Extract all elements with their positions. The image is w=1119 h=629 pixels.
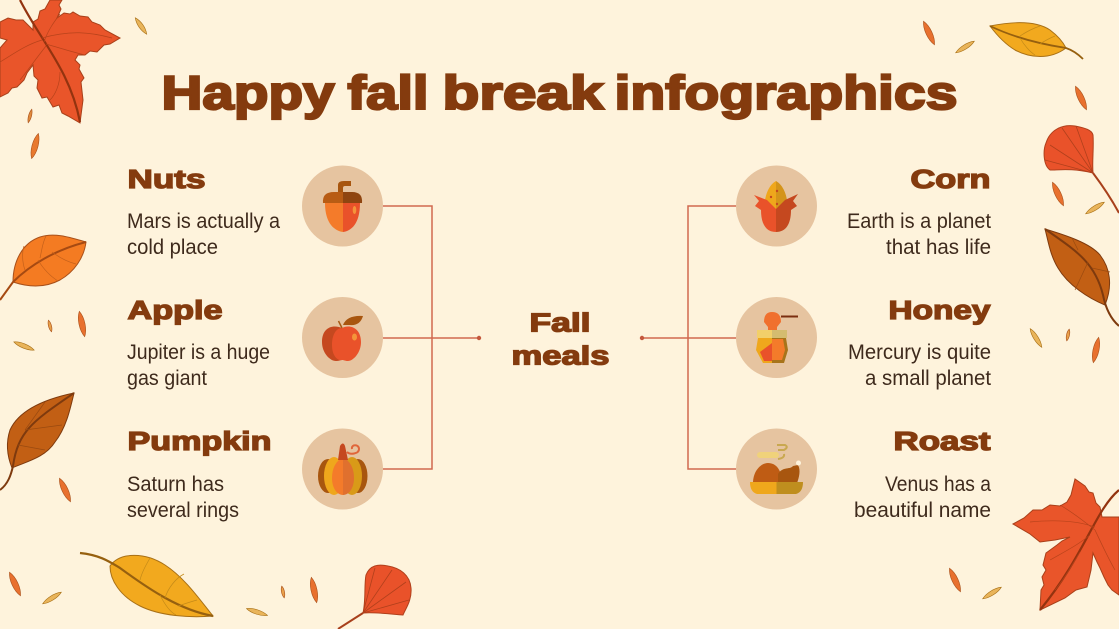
text: roast description: Venus has a	[885, 472, 991, 496]
title: fall	[348, 66, 428, 119]
title	[162, 66, 958, 119]
connector: right bracket	[640, 206, 736, 469]
text: corn description	[847, 209, 991, 259]
center label: fall meals	[512, 310, 610, 370]
leaf: yellow bottom	[80, 553, 213, 617]
heading: corn: Corn	[910, 166, 990, 194]
item: honey	[736, 297, 992, 390]
text: corn description: that has life	[886, 235, 991, 259]
icon: acorn	[302, 166, 383, 246]
text: apple description: gas giant	[127, 366, 207, 390]
leaf: maple bottom right	[1013, 479, 1119, 610]
center label: fall meals: Fall	[530, 310, 590, 338]
item: roast	[736, 428, 991, 522]
text: honey description: Mercury is quite	[848, 340, 991, 364]
leaf: ginkgo right	[1044, 126, 1119, 213]
item: apple	[127, 297, 383, 390]
center label: fall meals: meals	[512, 342, 610, 370]
leaf: orange left	[0, 235, 86, 300]
heading: honey: Honey	[888, 297, 992, 325]
heading: apple: Apple	[128, 297, 222, 325]
text: pumpkin description: several rings	[127, 498, 239, 522]
icon: apple	[302, 297, 383, 378]
item: corn	[736, 166, 991, 259]
text: pumpkin description: Saturn has	[127, 472, 224, 496]
text: nuts description: cold place	[127, 235, 218, 259]
text: nuts description	[127, 209, 280, 259]
connector: left bracket	[383, 206, 481, 469]
text: roast description	[854, 472, 991, 522]
icon: roast	[736, 428, 817, 510]
icon: pumpkin	[302, 428, 383, 510]
leaf: ginkgo bottom	[338, 565, 411, 629]
heading: pumpkin: Pumpkin	[128, 428, 272, 456]
text: honey description: a small planet	[865, 366, 991, 390]
item: nuts	[127, 166, 383, 259]
text: apple description	[127, 340, 270, 390]
text: corn description: Earth is a planet	[847, 209, 991, 233]
text: apple description: Jupiter is a huge	[127, 340, 270, 364]
title: infographics	[614, 66, 958, 119]
title: Happy	[162, 66, 334, 119]
icon: corn	[736, 166, 817, 246]
text: honey description	[848, 340, 991, 390]
text: roast description: beautiful name	[854, 498, 991, 522]
leaf: yellow top right	[990, 23, 1083, 59]
item: pumpkin	[127, 428, 383, 522]
heading: nuts: Nuts	[128, 166, 206, 194]
leaf: brown right	[1045, 229, 1119, 326]
icon: honey jar	[736, 297, 817, 378]
leaf: brown left	[0, 393, 74, 490]
title: break	[442, 66, 605, 119]
heading: roast: Roast	[894, 428, 991, 456]
text: nuts description: Mars is actually a	[127, 209, 280, 233]
text: pumpkin description	[127, 472, 239, 522]
leaf: maple top left	[0, 0, 120, 123]
